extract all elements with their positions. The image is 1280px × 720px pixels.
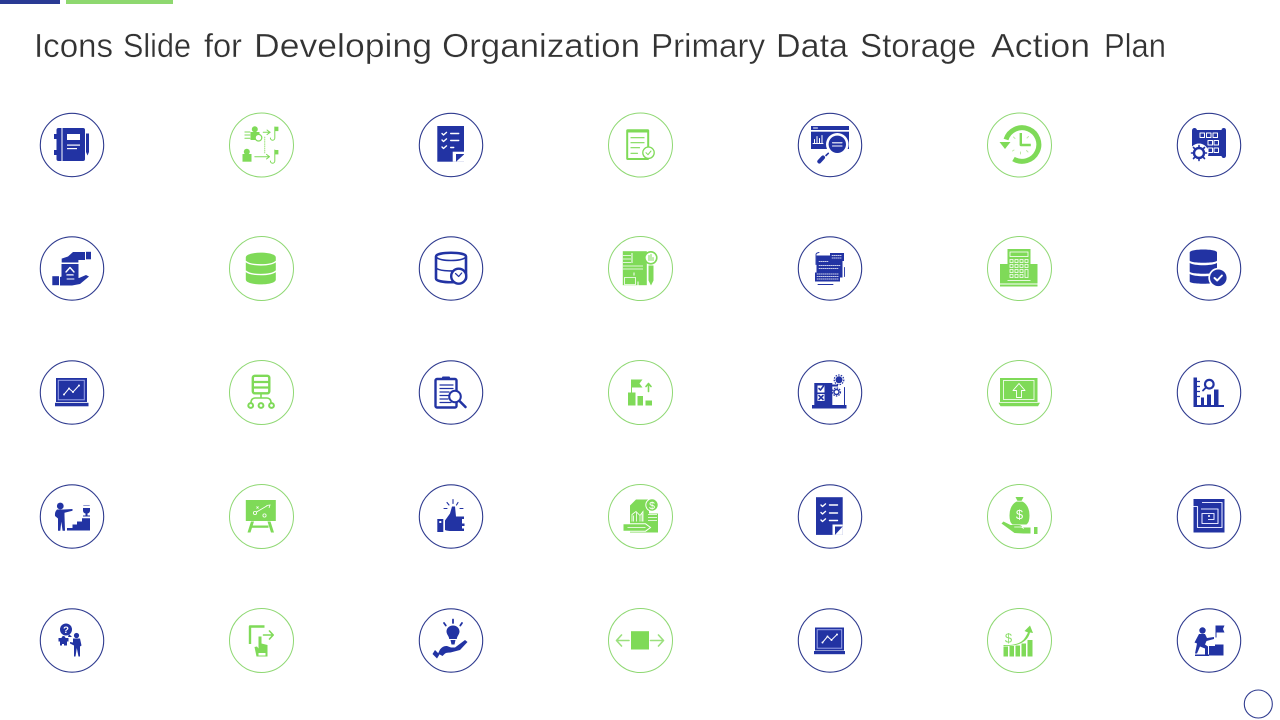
icon: dollar growth chart: $ <box>1005 630 1013 646</box>
icon: green database <box>230 236 294 300</box>
icon: checklist document <box>798 485 862 548</box>
icon: action flow with people and flags <box>230 113 294 177</box>
accent bar: green <box>66 0 173 4</box>
icon: hands passing jar <box>40 237 104 300</box>
icon: hand tapping tablet with arrow <box>230 608 294 672</box>
icon: person climbing steps to flag <box>1177 609 1241 672</box>
title <box>34 27 1166 64</box>
title: Organization <box>442 27 640 64</box>
title: Plan <box>1104 27 1166 64</box>
icon: presentation board with strategy <box>230 484 294 548</box>
icon: person with puzzle and question bubble <box>40 609 104 672</box>
title: Primary <box>651 27 765 64</box>
icon: dollar growth chart <box>988 608 1052 672</box>
icon: infographic plan with bulb and pencil <box>608 236 672 300</box>
icon: laptop with line chart <box>40 361 104 424</box>
icon: dashboard with magnifier <box>798 113 862 177</box>
icon: code screen with keyboard <box>798 237 862 300</box>
icon: database with check badge <box>1177 237 1241 300</box>
title: Developing <box>254 27 432 64</box>
icon: calculator building <box>988 236 1052 300</box>
title: Action <box>991 27 1090 64</box>
icon: person with puzzle and question bubble: ? <box>63 625 69 636</box>
icon: document with check badge <box>608 113 672 177</box>
icon: notebook <box>40 113 104 177</box>
page number circle <box>1244 690 1272 718</box>
title: Icons <box>34 27 113 64</box>
icon: man pointing at trophy on stairs <box>40 485 104 548</box>
title: for <box>204 27 242 64</box>
icon: square with left and right arrows <box>608 608 672 672</box>
icon: database with clock <box>419 237 483 300</box>
icon: laptop checklist with gears <box>798 361 862 424</box>
icon: blueprint with gear <box>1177 113 1241 177</box>
icon: financial report with pencil <box>608 484 672 548</box>
icon: maze <box>1177 485 1241 548</box>
icon: flag on bars with up arrow <box>608 360 672 424</box>
title: Data <box>776 27 849 64</box>
icon: laptop with upload arrow <box>988 360 1052 424</box>
icon: server hierarchy <box>230 360 294 424</box>
icon: hand holding money bag: $ <box>1016 507 1024 522</box>
icon: hand holding light bulb <box>419 609 483 672</box>
icon: clipboard with magnifier <box>419 361 483 424</box>
icon: thumbs up with rays <box>419 485 483 548</box>
icon: clock with history arrow <box>988 113 1052 177</box>
icon: checklist document <box>419 113 483 177</box>
icon: hand holding money bag <box>988 484 1052 548</box>
icon: ruler chart with magnifier <box>1177 361 1241 424</box>
title: Storage <box>860 27 976 64</box>
icon: financial report with pencil: $ <box>649 500 655 512</box>
icon: laptop with line chart <box>798 609 862 672</box>
accent bar: blue <box>0 0 60 4</box>
title: Slide <box>123 27 191 64</box>
